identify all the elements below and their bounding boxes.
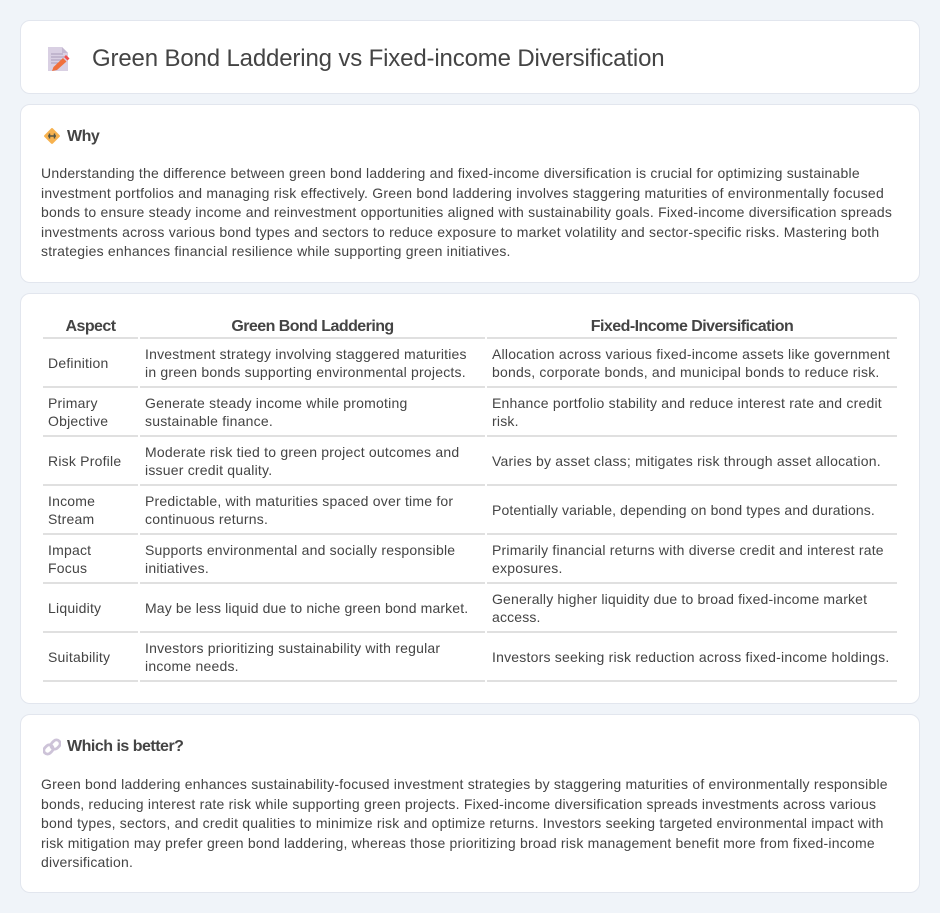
text block: which is better paragraph: Green bond laddering enhances sustainability-focused investment strategies by staggering maturities of environmentally responsible bbox=[41, 776, 888, 792]
definition: green bond laddering: in green bonds supporting environmental projects. bbox=[145, 364, 466, 380]
income stream: fixed-income diversification: Potentially variable, depending on bond types and durations. bbox=[492, 502, 875, 518]
heading: why: Why bbox=[67, 128, 99, 145]
row: income stream: Income bbox=[48, 493, 95, 509]
row: definition: Definition bbox=[48, 355, 108, 371]
text block: why paragraph bbox=[41, 165, 892, 259]
row: primary objective: Objective bbox=[48, 413, 108, 429]
liquidity: green bond laddering: May be less liquid due to niche green bond market. bbox=[145, 600, 468, 616]
suitability: green bond laddering: income needs. bbox=[145, 658, 239, 674]
row: impact focus bbox=[48, 542, 91, 576]
impact focus: fixed-income diversification: Primarily financial returns with diverse credit and interest rate bbox=[492, 542, 884, 558]
definition: fixed-income diversification: bonds, corporate bonds, and municipal bonds to reduce risk. bbox=[492, 364, 880, 380]
suitability: green bond laddering bbox=[145, 640, 440, 674]
text block: why paragraph: investment portfolios and managing risk effectively. Green bond laddering involves staggering maturities of environmentally focused bbox=[41, 185, 884, 201]
row: impact focus: Focus bbox=[48, 560, 87, 576]
text block: which is better paragraph: risk mitigation may prefer green bond laddering, whereas those prioritizing broad risk management benefit more from fixed-income bbox=[41, 835, 875, 851]
row: primary objective bbox=[48, 395, 108, 429]
definition: green bond laddering bbox=[145, 346, 467, 380]
liquidity: fixed-income diversification: access. bbox=[492, 609, 541, 625]
text block: why paragraph: Understanding the difference between green bond laddering and fixed-income diversification is crucial for optimizing sustainable bbox=[41, 165, 860, 181]
impact focus: green bond laddering bbox=[145, 542, 455, 576]
income stream: green bond laddering bbox=[145, 493, 453, 527]
panel: which is better bbox=[20, 714, 920, 893]
text block: why paragraph: investments across various bond types and sectors to reduce exposure to market volatility and sector-specific risks. Mastering both bbox=[41, 224, 879, 240]
definition: fixed-income diversification: Allocation across various fixed-income assets like government bbox=[492, 346, 890, 362]
primary objective: fixed-income diversification: Enhance portfolio stability and reduce interest rate and credit bbox=[492, 395, 882, 411]
text block: which is better paragraph: bond types, sectors, and credit qualities to minimize risk and optimize returns. Investors seeking targeted environmental impact with bbox=[41, 815, 884, 831]
primary objective: green bond laddering: Generate steady income while promoting bbox=[145, 395, 407, 411]
liquidity: fixed-income diversification: Generally higher liquidity due to broad fixed-income market bbox=[492, 591, 867, 607]
income stream: green bond laddering: Predictable, with maturities spaced over time for bbox=[145, 493, 453, 509]
risk profile: green bond laddering bbox=[145, 444, 459, 478]
impact focus: green bond laddering: Supports environmental and socially responsible bbox=[145, 542, 455, 558]
heading: which is better: Which is better? bbox=[67, 738, 183, 755]
impact focus: fixed-income diversification: exposures. bbox=[492, 560, 563, 576]
icon: chain link bbox=[43, 738, 61, 756]
suitability: green bond laddering: Investors prioritizing sustainability with regular bbox=[145, 640, 440, 656]
primary objective: fixed-income diversification: risk. bbox=[492, 413, 519, 429]
text block: which is better paragraph: bonds, reducing interest rate risk while supporting green projects. Fixed-income diversification spreads investments across various bbox=[41, 796, 876, 812]
primary objective: fixed-income diversification bbox=[492, 395, 882, 429]
income stream: green bond laddering: continuous returns. bbox=[145, 511, 268, 527]
row: income stream: Stream bbox=[48, 511, 94, 527]
suitability: fixed-income diversification: Investors seeking risk reduction across fixed-income holdings. bbox=[492, 649, 889, 665]
row: suitability: Suitability bbox=[48, 649, 110, 665]
primary objective: green bond laddering bbox=[145, 395, 407, 429]
row: income stream bbox=[48, 493, 95, 527]
icon: document with pencil bbox=[48, 47, 70, 71]
row: risk profile: Risk Profile bbox=[48, 453, 121, 469]
definition: green bond laddering: Investment strategy involving staggered maturities bbox=[145, 346, 467, 362]
row: primary objective: Primary bbox=[48, 395, 98, 411]
table header: green bond laddering: Green Bond Laddering bbox=[231, 318, 394, 335]
table header: fixed-income diversification: Fixed-Income Diversification bbox=[591, 318, 793, 335]
risk profile: green bond laddering: issuer credit quality. bbox=[145, 462, 272, 478]
text block: why paragraph: strategies enhances financial resilience while supporting green initiatives. bbox=[41, 243, 511, 259]
text block: which is better paragraph bbox=[41, 776, 888, 870]
risk profile: green bond laddering: Moderate risk tied to green project outcomes and bbox=[145, 444, 459, 460]
row: liquidity: Liquidity bbox=[48, 600, 101, 616]
panel: title card bbox=[20, 20, 920, 94]
definition: fixed-income diversification bbox=[492, 346, 890, 380]
table header: aspect: Aspect bbox=[65, 318, 116, 335]
impact focus: green bond laddering: initiatives. bbox=[145, 560, 209, 576]
row: impact focus: Impact bbox=[48, 542, 91, 558]
panel: why bbox=[20, 104, 920, 283]
icon: warning diamond bbox=[44, 128, 60, 144]
panel: comparison table bbox=[20, 293, 920, 704]
impact focus: fixed-income diversification bbox=[492, 542, 884, 576]
risk profile: fixed-income diversification: Varies by asset class; mitigates risk through asset allocation. bbox=[492, 453, 881, 469]
title: Green Bond Laddering vs Fixed-income Diversification bbox=[92, 45, 664, 72]
text block: which is better paragraph: diversification. bbox=[41, 854, 133, 870]
primary objective: green bond laddering: sustainable finance. bbox=[145, 413, 273, 429]
text block: why paragraph: bonds to ensure steady income and reinvestment opportunities aligned with sustainability goals. Fixed-income diversification spreads bbox=[41, 204, 892, 220]
liquidity: fixed-income diversification bbox=[492, 591, 867, 625]
